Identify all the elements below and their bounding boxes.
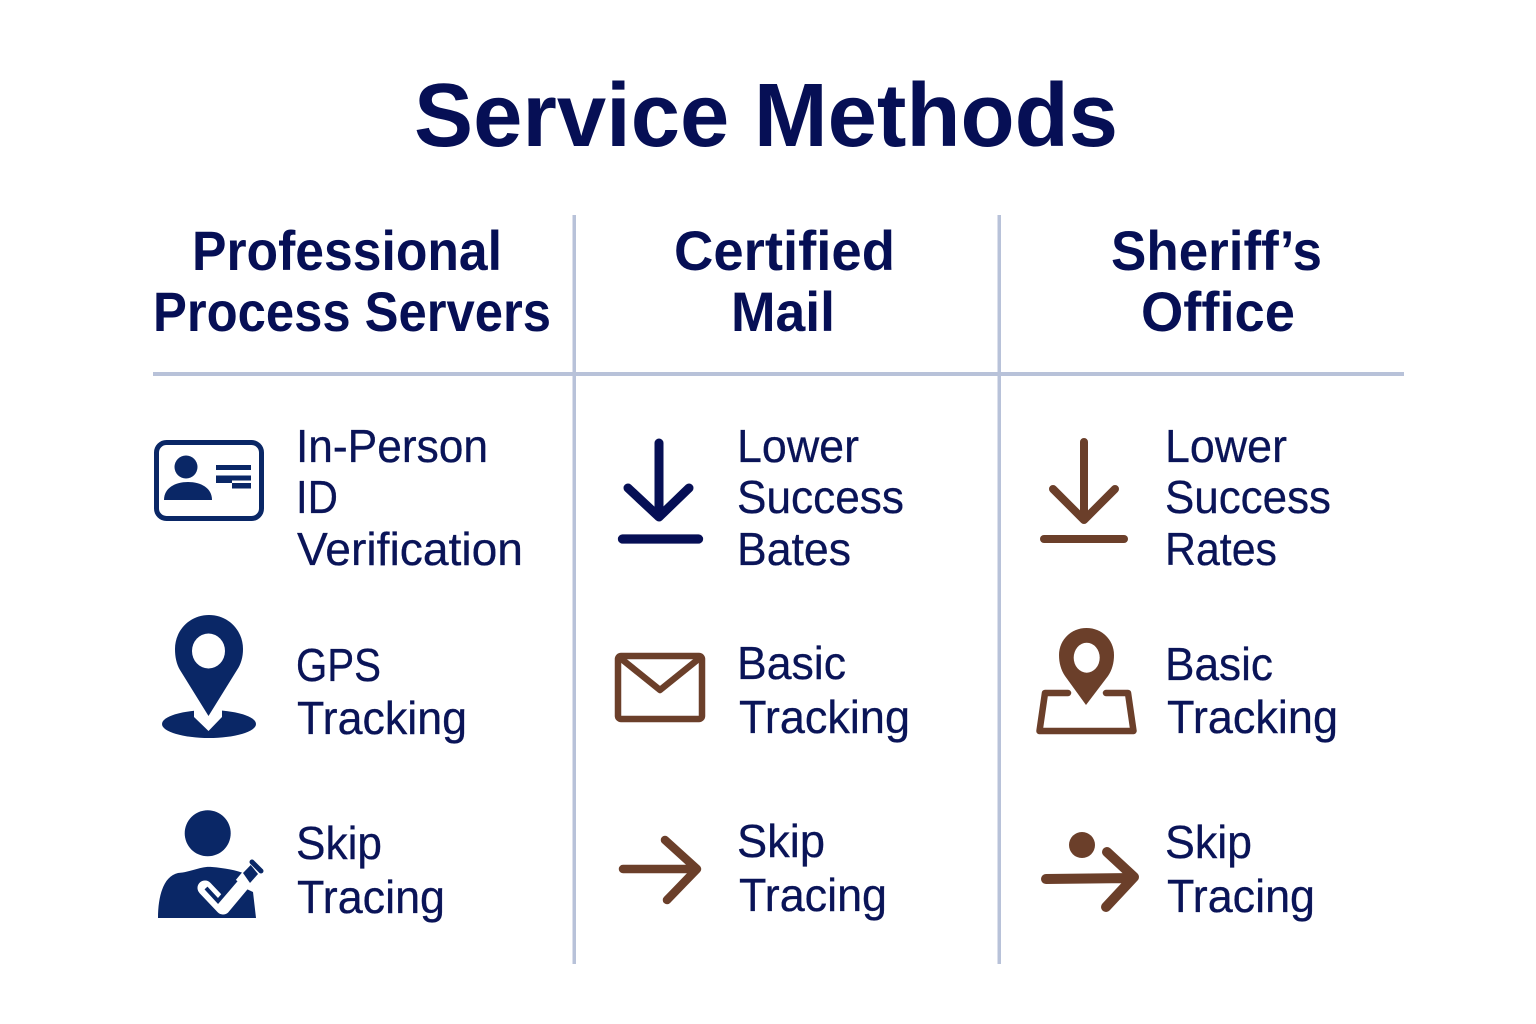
text: in-person id verification <box>296 420 523 575</box>
text: lower success rates: Success <box>1165 471 1331 523</box>
text: gps tracking: Tracking <box>297 692 467 744</box>
text: basic tracking <box>737 637 910 743</box>
heading: certified mail: Certified <box>674 219 895 282</box>
text: lower success bates: Success <box>737 471 904 523</box>
heading: sheriff's office <box>1111 219 1322 343</box>
text: basic tracking <box>1165 638 1338 743</box>
text: gps tracking: GPS <box>296 639 381 691</box>
heading: professional process servers: Professional <box>192 219 502 282</box>
heading: professional process servers: Process Servers <box>153 280 551 343</box>
text: basic tracking: Basic <box>737 637 846 689</box>
panel: sheriff's office <box>1040 219 1338 922</box>
text: basic tracking: Basic <box>1165 638 1273 690</box>
text: skip tracing: Skip <box>1165 816 1252 868</box>
panel: professional process servers <box>153 219 551 923</box>
text: in-person id verification: ID <box>296 471 338 523</box>
text: skip tracing: Tracing <box>739 869 887 921</box>
title: Service Methods <box>414 66 1118 166</box>
text: skip tracing <box>737 815 887 921</box>
text: skip tracing <box>1165 816 1315 922</box>
text: lower success bates: Lower <box>737 420 859 472</box>
text: skip tracing: Tracing <box>1167 870 1315 922</box>
icon: dot and arrow <box>1046 832 1134 907</box>
heading: sheriff's office: Office <box>1141 280 1295 343</box>
text: basic tracking: Tracking <box>1167 691 1338 743</box>
text: skip tracing: Skip <box>296 817 382 869</box>
text: skip tracing <box>296 817 445 923</box>
text: in-person id verification: Verification <box>297 523 523 575</box>
icon: gps pin <box>162 615 256 738</box>
heading: certified mail <box>674 219 895 343</box>
heading: sheriff's office: Sheriff’s <box>1111 219 1322 282</box>
text: gps tracking <box>296 639 467 744</box>
icon: download arrow brown <box>1044 442 1124 539</box>
text: in-person id verification: In-Person <box>296 420 488 472</box>
text: lower success rates: Lower <box>1165 420 1287 472</box>
text: skip tracing: Skip <box>737 815 825 867</box>
text: basic tracking: Tracking <box>739 691 910 743</box>
icon: right arrow <box>623 840 697 900</box>
text: lower success bates <box>737 420 904 575</box>
heading: professional process servers <box>153 219 551 343</box>
icon: download arrow navy <box>622 443 698 539</box>
icon: envelope <box>618 656 702 719</box>
icon: verified person <box>158 810 270 918</box>
text: lower success bates: Bates <box>737 523 851 575</box>
text: lower success rates: Rates <box>1165 523 1277 575</box>
icon: id card <box>156 442 262 518</box>
text: skip tracing: Tracing <box>297 871 445 923</box>
text: lower success rates <box>1165 420 1331 575</box>
panel: certified mail <box>618 219 910 921</box>
heading: certified mail: Mail <box>731 280 835 343</box>
icon: map pin <box>1040 628 1134 731</box>
